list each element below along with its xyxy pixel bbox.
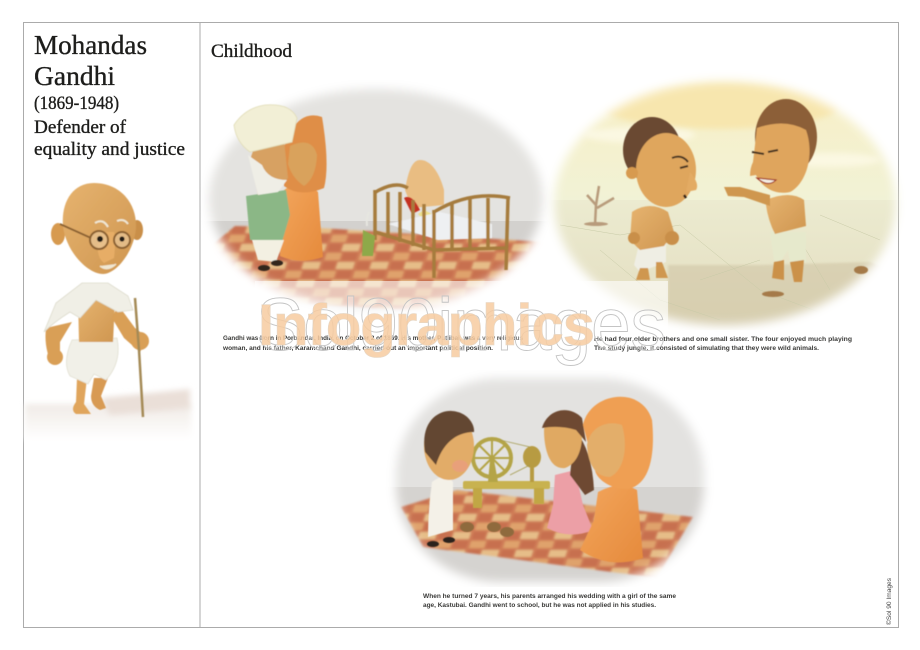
- heading: Childhood: Childhood: [211, 41, 293, 62]
- title block: Defender of: [34, 117, 127, 138]
- watermark: Infographics: Infographics: [258, 293, 595, 358]
- title block: Mohandas: [34, 30, 147, 60]
- caption: brothers: He had four older brothers and one small sister. The four enjoyed much playing: [594, 336, 852, 343]
- watermark: Sol90images: Sol90images: [256, 283, 666, 366]
- illustration: brothers playing on cracked earth: [540, 70, 910, 330]
- title block: Gandhi: [34, 61, 115, 91]
- illustration: parents at the crib: [206, 86, 546, 310]
- title block: (1869-1948): [34, 93, 119, 114]
- title block: equality and justice: [34, 139, 185, 160]
- caption: wedding: When he turned 7 years, his parents arranged his wedding with a girl of the same: [423, 593, 676, 600]
- caption: brothers: [594, 336, 852, 352]
- caption: wedding: [423, 593, 676, 609]
- watermark veil: [255, 281, 668, 343]
- caption: birth: Gandhi was born in Porbandar, India, on October 2 of 1869. His mother, Putlibai, was a very religious: [223, 335, 523, 342]
- caption: birth: [222, 335, 523, 352]
- caption: birth: woman, and his father, Karamchand Gandhi, carried out an important political position.: [222, 345, 493, 352]
- caption: brothers: The study jungle, it consisted of simulating that they were wild animals.: [594, 345, 819, 352]
- illustration: Gandhi walking: [25, 183, 191, 440]
- caption: wedding: age, Kastubai. Gandhi went to school, but he was not applied in his studies.: [423, 602, 656, 609]
- illustration: spinning wheel and wedding: [385, 370, 715, 587]
- title block: [34, 30, 185, 160]
- credit: ©Sol 90 Images: [885, 577, 893, 625]
